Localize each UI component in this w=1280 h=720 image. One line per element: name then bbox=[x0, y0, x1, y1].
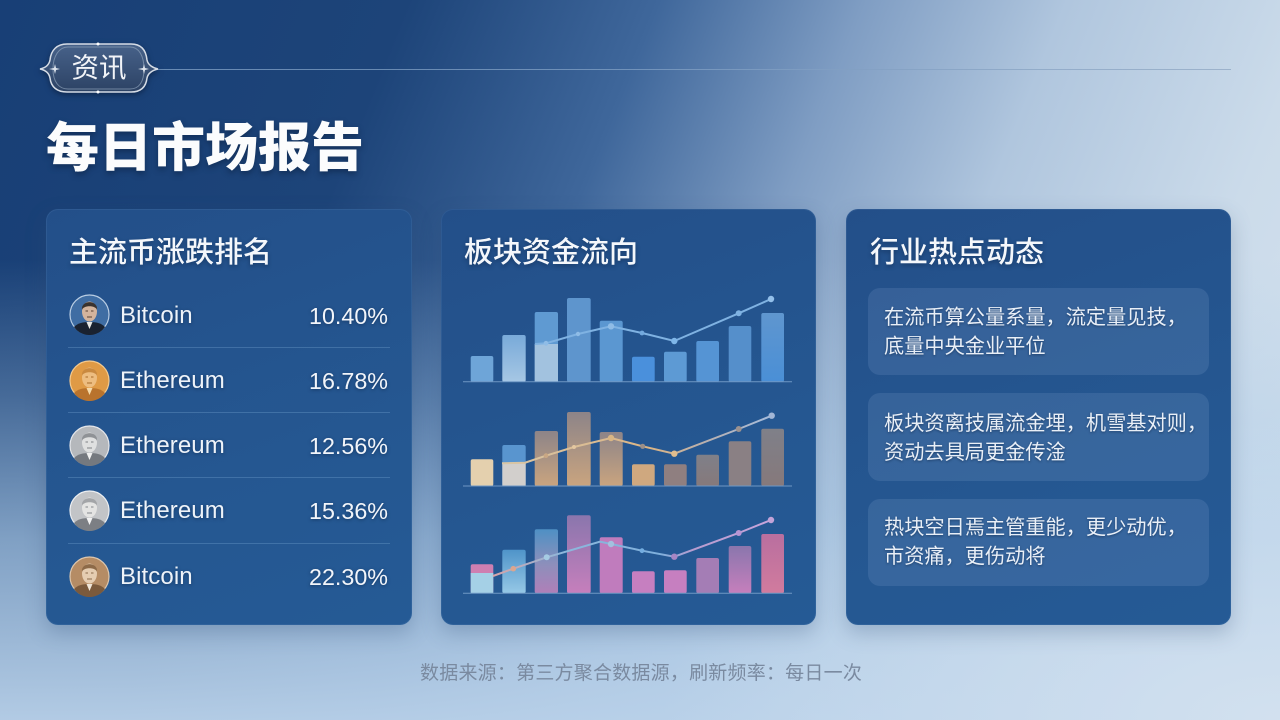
row: Ethereum 16.78% bbox=[69, 360, 388, 401]
panel: 板块资金流向 bbox=[441, 209, 816, 625]
news item 2: 板块资离技属流金埋，机雪基对则， bbox=[884, 413, 1207, 435]
news item 3: 热块空日焉主管重能，更少动优， bbox=[884, 517, 1187, 539]
row: Ethereum 12.56% bbox=[69, 425, 388, 466]
row: Ethereum 16.78%: 16.78% bbox=[309, 368, 388, 394]
news item 2: 资动去具局更金传淦 bbox=[884, 442, 1066, 464]
row: Bitcoin 10.40%: Bitcoin bbox=[120, 302, 193, 329]
panel: 主流币涨跌排名 bbox=[46, 209, 412, 625]
news item 2 bbox=[868, 393, 1209, 481]
news item 1: 底量中央金业平位 bbox=[884, 336, 1046, 358]
news item 1: 在流币算公量系量，流定量见技， bbox=[884, 307, 1187, 329]
footer source note: 数据来源：第三方聚合数据源，刷新频率：每日一次 bbox=[420, 663, 862, 684]
row: Ethereum 15.36%: 15.36% bbox=[309, 498, 388, 524]
panel: 行业热点动态 bbox=[846, 209, 1231, 625]
news item 3: 市资痛，更伤动将 bbox=[884, 546, 1046, 568]
panel: 板块资金流向: 板块资金流向 bbox=[464, 237, 638, 269]
row: Ethereum 12.56%: Ethereum bbox=[120, 432, 225, 459]
row: Ethereum 12.56%: 12.56% bbox=[309, 433, 388, 459]
panel: 行业热点动态: 行业热点动态 bbox=[870, 237, 1044, 269]
chart: blue bars bbox=[463, 296, 792, 382]
chart: tan bars bbox=[463, 412, 792, 486]
panel: 主流币涨跌排名: 主流币涨跌排名 bbox=[69, 237, 272, 269]
row: Bitcoin 22.30%: Bitcoin bbox=[120, 563, 193, 590]
chart: pink bars bbox=[463, 515, 792, 593]
row: Ethereum 15.36% bbox=[69, 490, 388, 531]
row: Ethereum 15.36%: Ethereum bbox=[120, 497, 225, 524]
title: 每日市场报告 bbox=[46, 119, 364, 178]
badge: 资讯: 资讯 bbox=[72, 52, 126, 83]
row: Bitcoin 22.30% bbox=[69, 556, 388, 597]
header rule bbox=[150, 68, 1231, 70]
news item 3 bbox=[868, 499, 1209, 586]
badge: 资讯 bbox=[40, 42, 160, 98]
news item 1 bbox=[868, 288, 1209, 375]
row: Bitcoin 10.40% bbox=[69, 294, 388, 335]
row: Bitcoin 10.40%: 10.40% bbox=[309, 303, 388, 329]
row: Ethereum 16.78%: Ethereum bbox=[120, 367, 225, 394]
row: Bitcoin 22.30%: 22.30% bbox=[309, 564, 388, 590]
